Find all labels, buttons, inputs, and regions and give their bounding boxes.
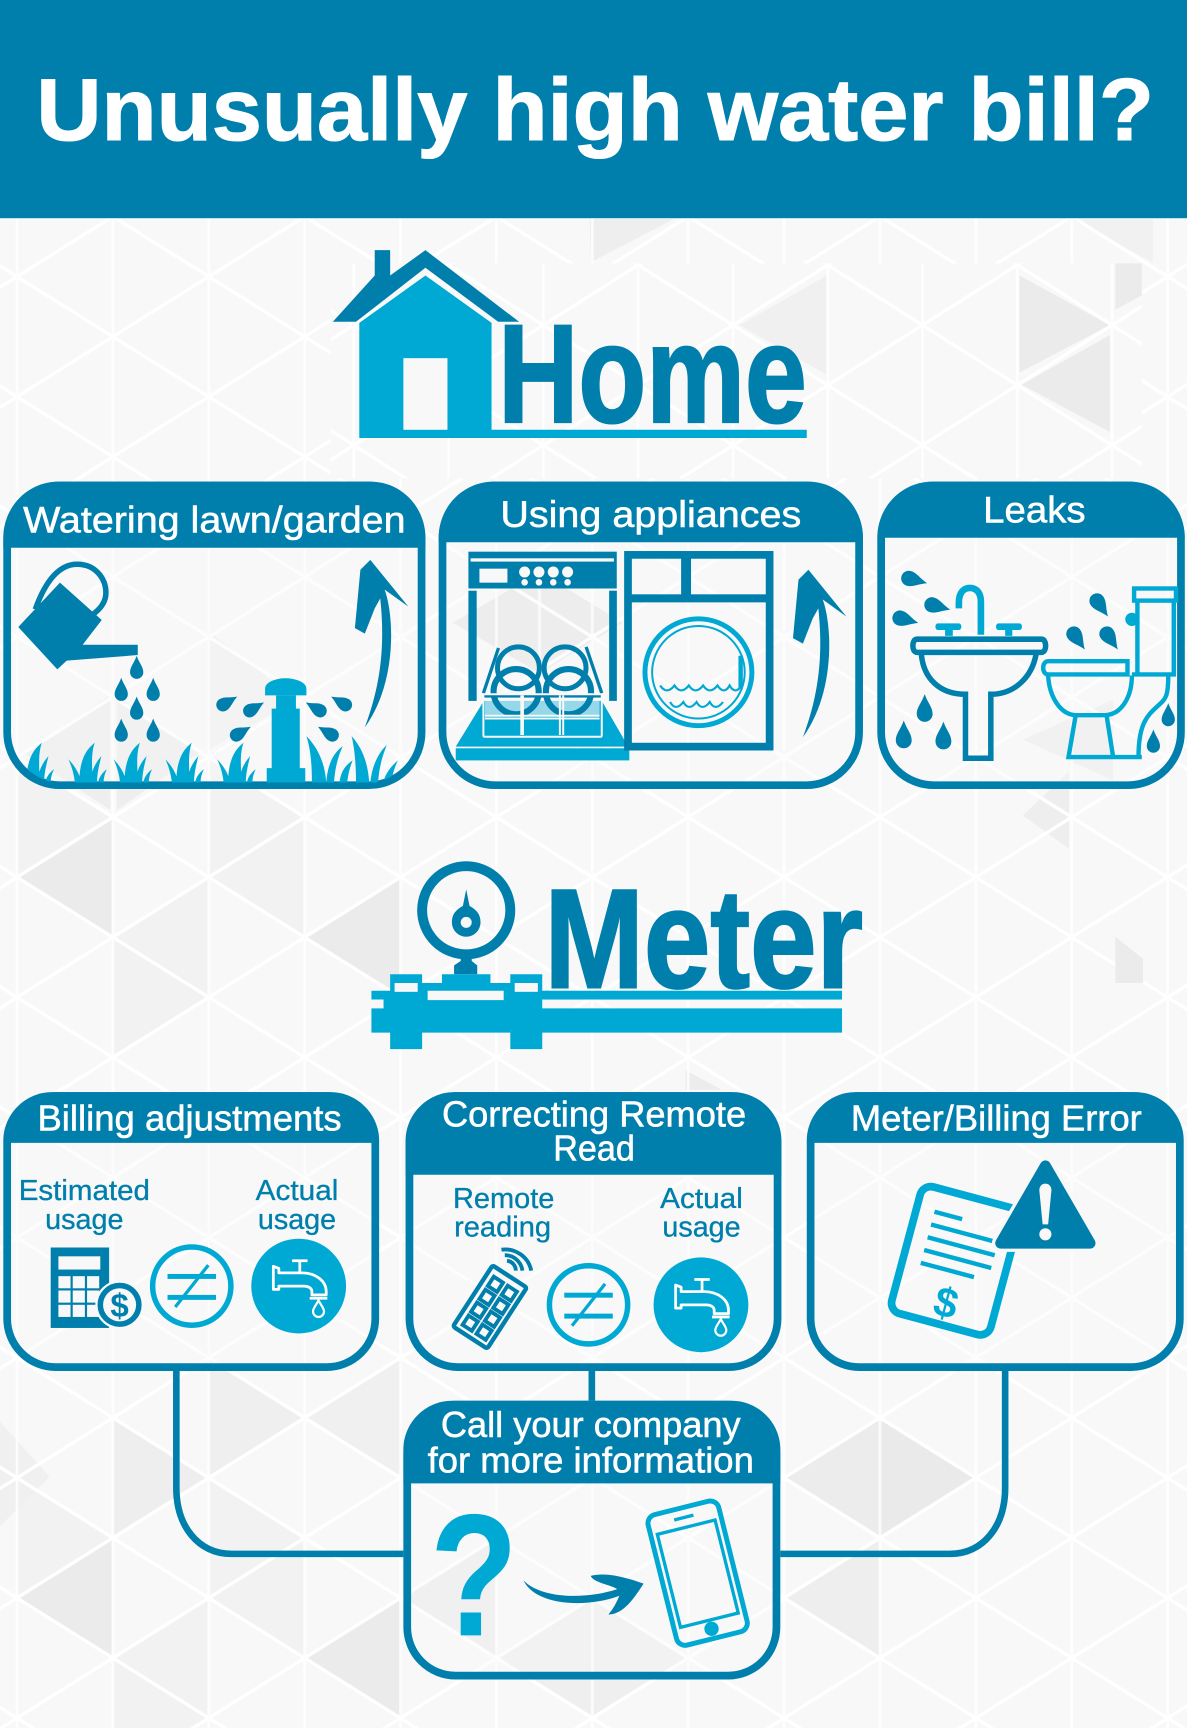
panel: using appliances: [439, 482, 863, 785]
icon: grass: [15, 736, 398, 782]
icon: sprinkler: [214, 678, 355, 782]
panel: watering lawn/garden: Watering lawn/garden: [23, 498, 406, 540]
connector lines: [176, 1371, 1005, 1554]
panel: correcting remote read: Read: [553, 1127, 635, 1168]
icon: remote control with signal: [453, 1249, 531, 1349]
icon: dishwasher: [456, 552, 629, 760]
title banner: [0, 0, 1187, 218]
icon: not equal: [549, 1266, 628, 1344]
panel: meter/billing error: Meter/Billing Error: [851, 1098, 1142, 1139]
heading: Meter with pipe gauge icon: Meter: [544, 859, 863, 1017]
icon: calculator with coin: [51, 1248, 143, 1328]
heading: Home with house icon: Home: [498, 295, 807, 452]
panel: watering lawn/garden: [3, 482, 425, 785]
icon: calculator with coin: $: [110, 1288, 129, 1325]
icon: question mark: ?: [430, 1477, 518, 1672]
label: actual usage: Actual: [660, 1183, 743, 1215]
panel: billing adjustments: Billing adjustments: [37, 1098, 342, 1139]
icon: bill document: $: [929, 1277, 964, 1328]
label: estimated usage: Estimated: [19, 1175, 150, 1207]
label: actual usage: [256, 1175, 338, 1236]
icon: bill document: [889, 1184, 1022, 1338]
arrow: rising usage: [355, 560, 408, 727]
icon: warning triangle: [1001, 1166, 1090, 1243]
icon: smartphone: [646, 1499, 749, 1647]
arrow: rising usage: [793, 570, 846, 737]
panel: billing adjustments: [3, 1092, 379, 1367]
title banner: Unusually high water bill?: [36, 60, 1154, 159]
arrow: question to phone: [524, 1574, 644, 1614]
panel: correcting remote read: [406, 1092, 781, 1367]
label: estimated usage: usage: [45, 1204, 123, 1236]
icon: washing machine: [628, 554, 770, 747]
panel: leaks: Leaks: [983, 488, 1086, 530]
heading: Home with house icon: [333, 250, 807, 452]
icon: leak drops around sink: [891, 569, 1175, 753]
panel: correcting remote read: Correcting Remote: [442, 1093, 746, 1134]
icon: sink: [913, 588, 1046, 758]
panel: call your company: [403, 1401, 780, 1676]
icon: tap: [654, 1257, 748, 1352]
panel: meter/billing error: [807, 1092, 1184, 1367]
panel: call your company: for more information: [428, 1439, 754, 1480]
panel: using appliances: Using appliances: [500, 493, 801, 535]
icon: not equal: [153, 1247, 231, 1325]
icon: watering can: [18, 564, 160, 742]
icon: toilet: [1043, 588, 1176, 757]
label: remote reading: [453, 1183, 554, 1243]
label: estimated usage: [19, 1175, 150, 1236]
panel: leaks: [877, 482, 1185, 785]
label: actual usage: Actual: [256, 1175, 338, 1207]
label: actual usage: [660, 1183, 743, 1243]
label: actual usage: usage: [662, 1211, 741, 1243]
label: remote reading: reading: [454, 1211, 551, 1243]
heading: Meter with pipe gauge icon: [371, 859, 863, 1049]
label: remote reading: Remote: [453, 1183, 554, 1215]
icon: tap: [251, 1239, 346, 1333]
label: actual usage: usage: [258, 1204, 336, 1236]
panel: call your company: Call your company: [441, 1404, 741, 1445]
